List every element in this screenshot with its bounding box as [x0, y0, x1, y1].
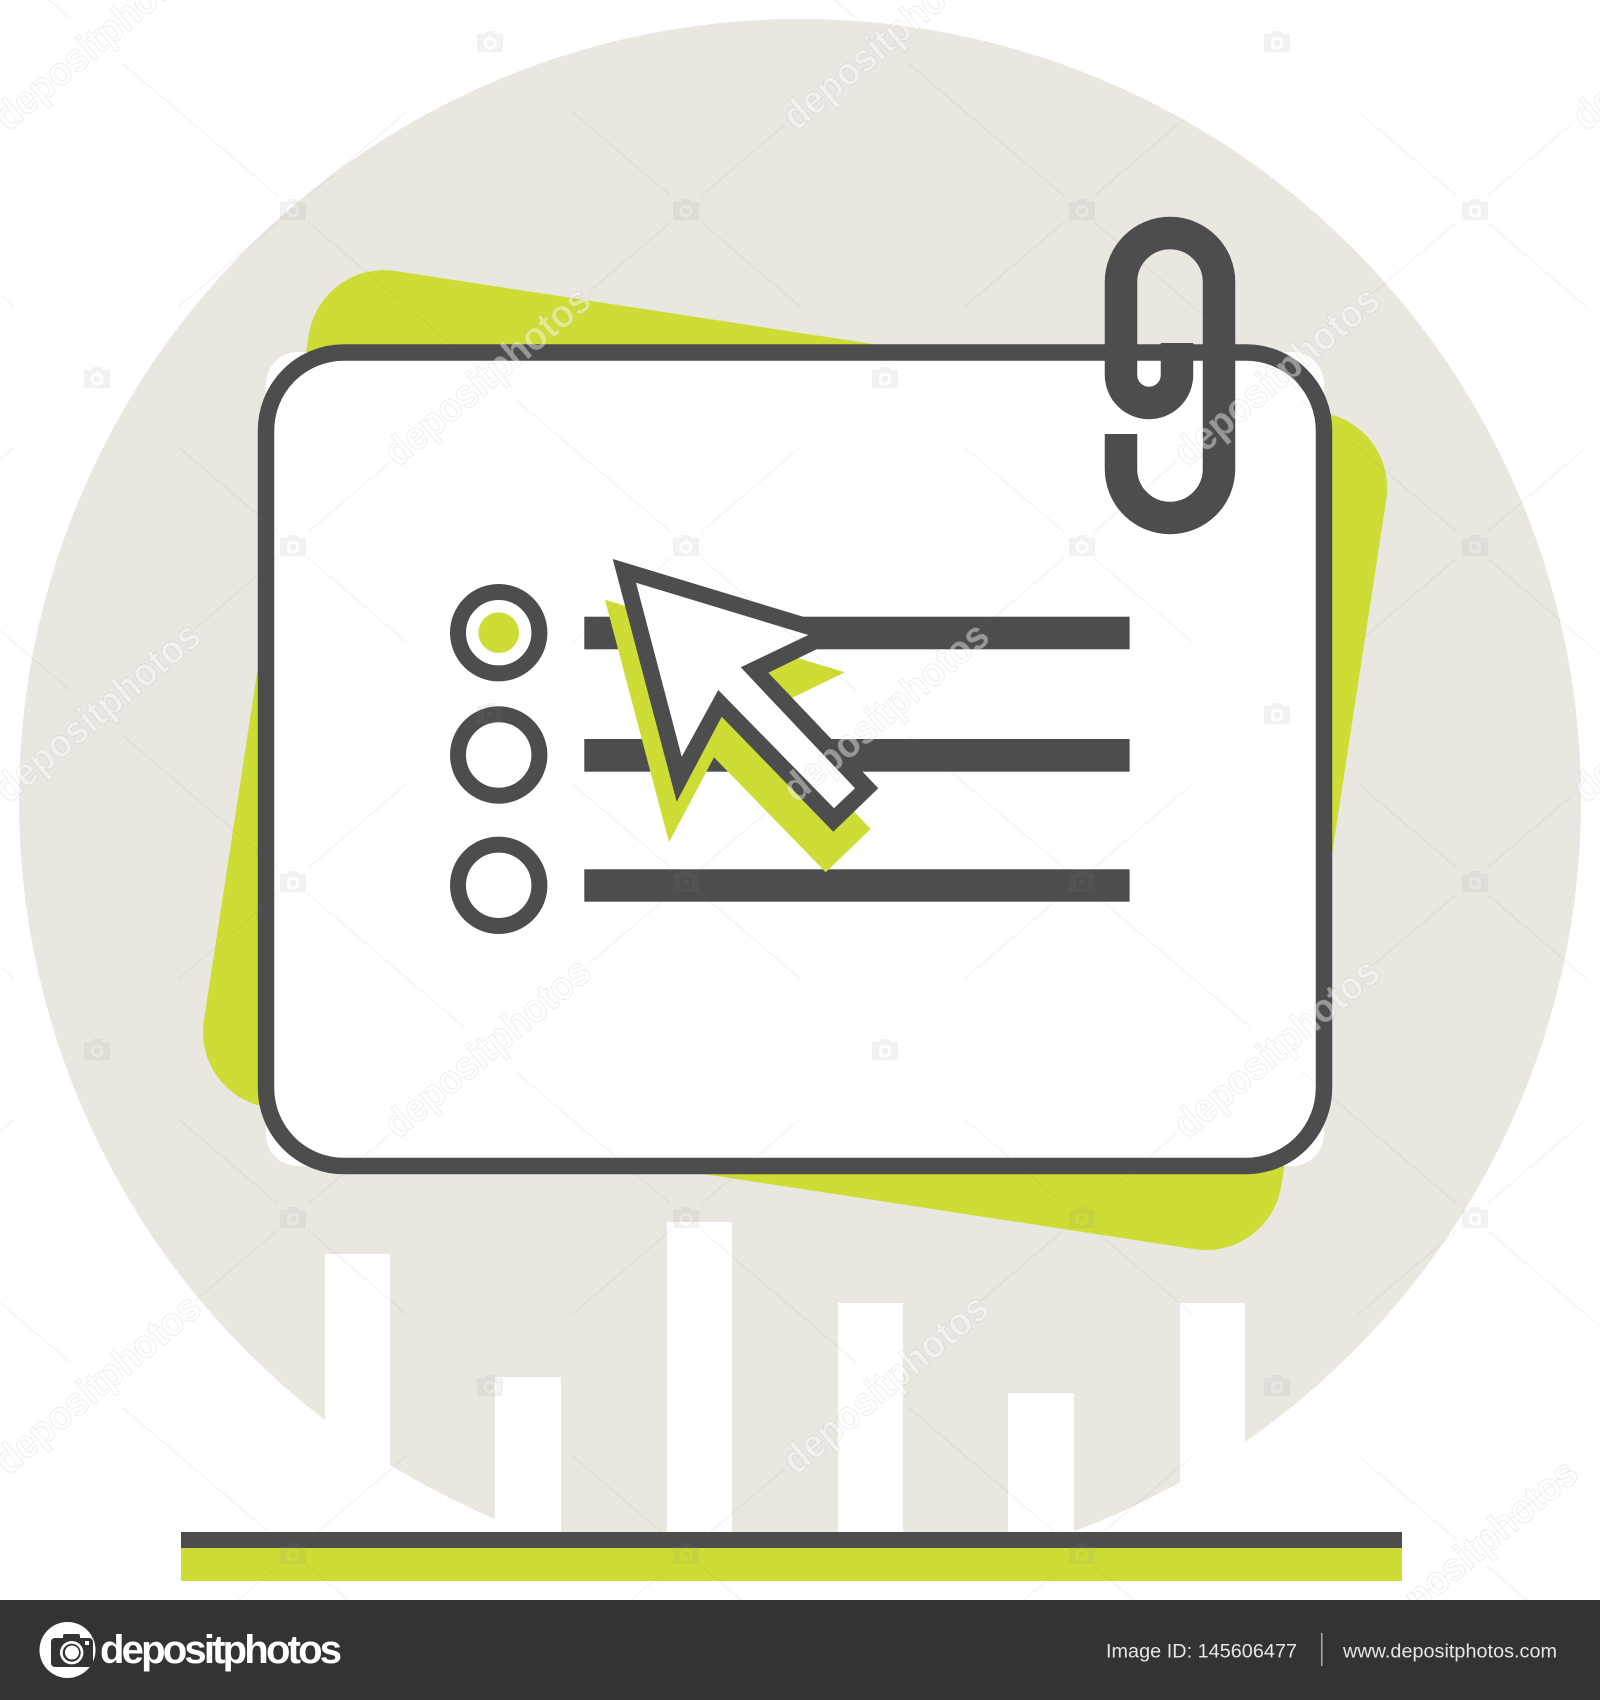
footer divider — [1321, 1633, 1322, 1666]
watermark text: depositphotos — [1363, 1450, 1586, 1648]
watermark text: depositphotos — [1165, 949, 1388, 1147]
icon: mouse cursor arrow with green shadow — [605, 559, 878, 872]
watermark camera marks — [84, 31, 1488, 1564]
list row 2: radio and line — [458, 714, 1130, 796]
watermark text: depositphotos — [774, 613, 997, 811]
icon: paperclip — [1121, 233, 1219, 518]
footer logo icon — [40, 1622, 96, 1678]
footer logo wordmark: depositphotos — [100, 1628, 342, 1672]
watermark text: depositphotos — [376, 277, 599, 475]
list row 1: selected radio and line — [458, 592, 1130, 673]
baseline: dark and green stripes — [181, 1532, 1402, 1581]
watermark text: depositphotos — [774, 1285, 997, 1483]
website url: www.depositphotos.com — [1342, 1640, 1557, 1662]
footer bar — [0, 1600, 1600, 1700]
watermark text: depositphotos — [1165, 277, 1388, 475]
list row 3: radio and line — [458, 845, 1130, 926]
image id: Image ID: 145606477 — [1106, 1640, 1297, 1662]
white card — [266, 352, 1324, 1166]
bar chart silhouette — [0, 1222, 1600, 1600]
green tilted back card — [192, 259, 1398, 1261]
watermark text: depositphotos — [376, 949, 599, 1147]
